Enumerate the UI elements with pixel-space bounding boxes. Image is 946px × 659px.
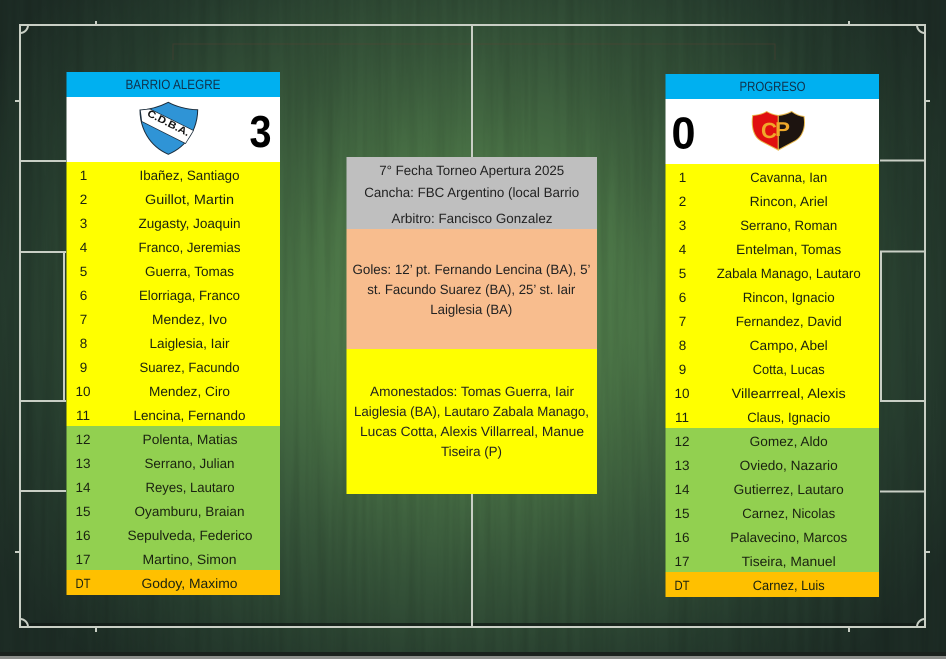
row 15 substitute [674,506,835,521]
row 4 [80,240,241,255]
row 10: 10 [75,384,91,399]
icon: C.D.B.A. crest [140,102,198,154]
row 16 substitute: Palavecino, Marcos [730,530,847,545]
row 8 [80,336,230,351]
yellow cards block: Laiglesia (BA), Lautaro Zabala Manago, [354,404,589,419]
row 9: Suarez, Facundo [140,360,240,375]
icon: C.P. crest: P [775,119,790,141]
row 13 substitute [75,456,234,471]
row coach [674,578,825,593]
row 6 [80,288,240,303]
row 11: 11 [76,408,90,423]
row 10: Villearrreal, Alexis [732,386,846,401]
row 4: Franco, Jeremias [138,240,241,255]
row 8: Laiglesia, Iair [150,336,230,351]
row 7: 7 [80,312,87,327]
row 16 substitute [75,528,252,543]
row 6: 6 [80,288,87,303]
row coach: DT [674,578,690,593]
row 2: 2 [80,192,87,207]
goals block: Laiglesia (BA) [430,302,512,317]
icon: C.P. crest: C [761,118,777,143]
row 12 substitute: 12 [75,432,91,447]
row 10: 10 [674,386,690,401]
row 8: 8 [679,338,686,353]
row 15 substitute [75,504,244,519]
row 5: Zabala Manago, Lautaro [717,266,861,281]
goals block: st. Facundo Suarez (BA), 25’ st. Iair [367,282,576,297]
row 13 substitute: 13 [674,458,690,473]
row 14 substitute: 14 [75,480,91,495]
row 11: 11 [675,410,689,425]
row 15 substitute: Oyamburu, Braian [134,504,244,519]
row 12 substitute: 12 [674,434,690,449]
row 5: Guerra, Tomas [145,264,234,279]
row 16 substitute [674,530,847,545]
row 11 [76,408,246,423]
row 1 [80,168,240,183]
row 10 [75,384,230,399]
row 2: 2 [679,194,686,209]
match details block: 7° Fecha Torneo Apertura 2025 [379,163,564,178]
row 11 [675,410,830,425]
row 17 substitute [674,554,836,569]
row 2 [80,192,234,207]
heading: Barrio Alegre: BARRIO ALEGRE [126,77,220,92]
icon: C.P. crest [752,112,805,150]
goals block: Goles: 12’ pt. Fernando Lencina (BA), 5’ [352,262,590,277]
row 14 substitute: Reyes, Lautaro [146,480,234,495]
row 6 [679,290,835,305]
row 9: 9 [679,362,686,377]
row 8 [679,338,828,353]
row 13 substitute [674,458,838,473]
panel: Barrio Alegre lineup [66,72,280,595]
row 16 substitute: 16 [75,528,91,543]
row 2 [679,194,828,209]
match details block [346,157,597,229]
row 4 [679,242,841,257]
row 9: 9 [80,360,87,375]
heading: Progreso: PROGRESO [740,79,806,94]
row 7: Fernandez, David [736,314,842,329]
row 3: 3 [679,218,686,233]
row 15 substitute: Carnez, Nicolas [742,506,835,521]
row 17 substitute: 17 [674,554,690,569]
row 5: 5 [80,264,87,279]
row 4: Entelman, Tomas [736,242,841,257]
row 12 substitute: Gomez, Aldo [750,434,828,449]
row coach: Carnez, Luis [753,578,825,593]
yellow cards block: Amonestados: Tomas Guerra, Iair [370,384,575,399]
row 13 substitute: Oviedo, Nazario [740,458,838,473]
row 12 substitute: Polenta, Matias [142,432,238,447]
row 10: Mendez, Ciro [149,384,230,399]
row 2: Guillot, Martin [145,192,234,207]
yellow cards block: Lucas Cotta, Alexis Villarreal, Manue [360,424,584,439]
row 15 substitute: 15 [75,504,91,519]
match details block: Cancha: FBC Argentino (local Barrio [364,185,579,200]
row 5: 5 [679,266,686,281]
row 17 substitute: Tiseira, Manuel [742,554,836,569]
row 17 substitute [75,552,236,567]
row 9 [679,362,825,377]
row 14 substitute: Gutierrez, Lautaro [734,482,844,497]
row coach [76,576,238,591]
row 13 substitute: 13 [75,456,91,471]
row 7 [80,312,227,327]
row 17 substitute: Martino, Simon [142,552,236,567]
goals block [346,229,597,349]
row 1: 1 [80,168,87,183]
row 7 [679,314,842,329]
row 17 substitute: 17 [75,552,91,567]
row 3: Zugasty, Joaquin [138,216,240,231]
row 3 [679,218,837,233]
row 2: Rincon, Ariel [750,194,828,209]
yellow cards block: Tiseira (P) [441,444,502,459]
row 9: Cotta, Lucas [753,362,825,377]
row 7: 7 [679,314,686,329]
row coach: DT [76,576,90,591]
row 1 [679,170,827,185]
row 12 substitute [674,434,828,449]
row 14 substitute [75,480,234,495]
yellow cards block [346,349,597,494]
row 9 [80,360,240,375]
row 11: Lencina, Fernando [134,408,246,423]
row 1: Ibañez, Santiago [140,168,240,183]
match details block: Arbitro: Fancisco Gonzalez [392,211,553,226]
row 16 substitute: Sepulveda, Federico [128,528,252,543]
row 8: 8 [80,336,87,351]
panel: match information [346,157,597,494]
row 1: Cavanna, Ian [750,170,827,185]
panel: Progreso lineup [666,74,879,597]
row 12 substitute [75,432,238,447]
row 14 substitute: 14 [674,482,690,497]
row 3: 3 [80,216,87,231]
row 16 substitute: 16 [674,530,690,545]
row 10 [674,386,846,401]
score: Progreso 0: 0 [672,108,696,158]
row 4: 4 [679,242,687,257]
row 1: 1 [679,170,686,185]
row 3: Serrano, Roman [740,218,837,233]
row 15 substitute: 15 [674,506,690,521]
row 11: Claus, Ignacio [747,410,830,425]
row 6: 6 [679,290,686,305]
row coach: Godoy, Maximo [142,576,238,591]
score: Barrio Alegre 3: 3 [250,106,272,157]
row 14 substitute [674,482,844,497]
row 7: Mendez, Ivo [152,312,227,327]
row 8: Campo, Abel [750,338,828,353]
row 4: 4 [80,240,88,255]
row 6: Elorriaga, Franco [139,288,240,303]
row 5 [80,264,234,279]
row 3 [80,216,240,231]
icon: C.D.B.A. crest: C.D.B.A. [145,108,191,139]
row 6: Rincon, Ignacio [743,290,835,305]
row 13 substitute: Serrano, Julian [144,456,234,471]
